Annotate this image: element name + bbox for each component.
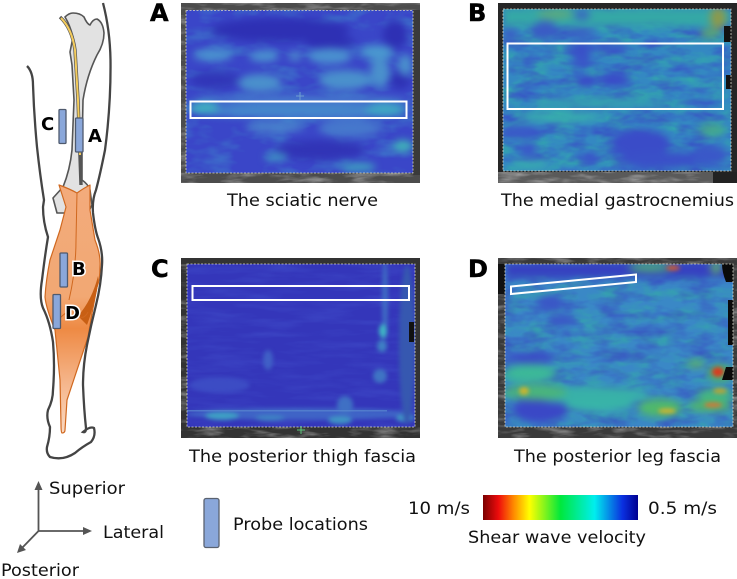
panel letter D: D <box>468 255 488 283</box>
region of interest box <box>511 274 636 294</box>
panel D: posterior leg fascia elastogram <box>498 258 737 438</box>
probe location A: A <box>88 126 102 147</box>
shear wave velocity colour bar: 0.5 m/s <box>648 499 717 519</box>
caption A: The sciatic nerve <box>226 191 378 211</box>
femur bone <box>53 13 104 213</box>
region of interest box <box>190 102 406 118</box>
region of interest box <box>192 286 409 300</box>
panel B: medial gastrocnemius elastogram <box>498 3 737 183</box>
probe location D <box>53 294 80 328</box>
panel A: sciatic nerve elastogram <box>181 3 420 183</box>
probe locations legend: Probe locations <box>233 515 368 535</box>
shear wave velocity colour bar: Shear wave velocity <box>468 528 646 548</box>
crosshair marker <box>296 92 304 100</box>
probe location B <box>60 253 86 287</box>
body outline <box>27 3 111 458</box>
shear wave velocity colour bar <box>408 495 717 548</box>
probe location C <box>41 110 66 144</box>
anatomical axes legend: Lateral <box>103 523 164 543</box>
caption D: The posterior leg fascia <box>513 447 721 467</box>
sciatic nerve <box>60 17 81 185</box>
probe location C: C <box>41 114 54 135</box>
panel letter C: C <box>151 255 169 283</box>
leg anatomy diagram <box>27 3 111 458</box>
anatomical axes legend: Superior <box>49 479 125 499</box>
probe locations legend <box>204 498 368 548</box>
shear wave velocity colour bar: 10 m/s <box>408 499 470 519</box>
anatomical axes legend <box>1 479 164 579</box>
calf muscle <box>45 185 100 433</box>
panel C: posterior thigh fascia elastogram <box>181 258 420 438</box>
caption B: The medial gastrocnemius <box>500 191 734 211</box>
probe location D: D <box>65 303 80 324</box>
region of interest box <box>508 44 723 109</box>
caption C: The posterior thigh fascia <box>188 447 416 467</box>
probe location A <box>76 118 102 152</box>
green crosshair marker <box>297 426 305 434</box>
probe location B: B <box>72 259 86 280</box>
